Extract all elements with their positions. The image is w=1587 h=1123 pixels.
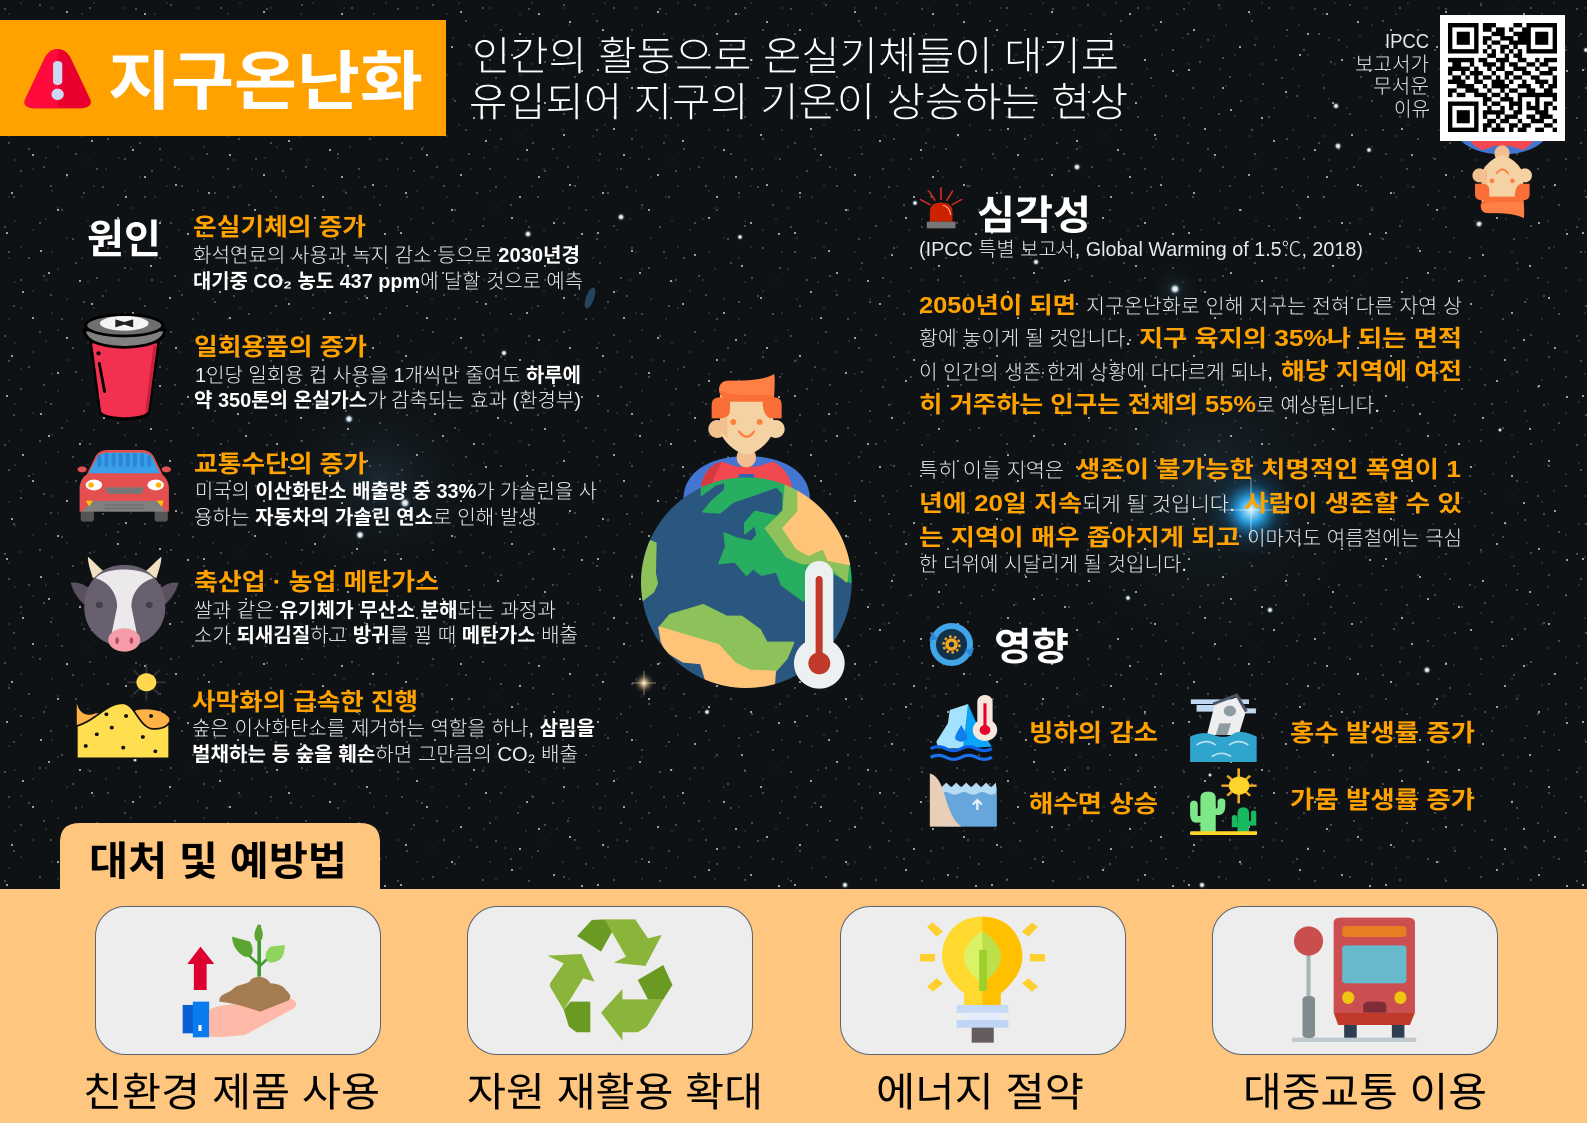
cause 1: greenhouse gases: [193, 214, 583, 293]
subtitle definition: 인간의 활동으로 온실기체들이 대기로: [472, 35, 1119, 79]
icon: disposable cup: [84, 315, 165, 421]
label: drought frequency: 가뭄 발생률 증가: [1290, 787, 1475, 814]
icon: desert: [77, 664, 169, 758]
paragraph 2: 는 지역이 매우 좁아지게 되고: [919, 524, 1240, 550]
cause 3: transport: 교통수단의 증가: [194, 451, 367, 478]
paragraph 1: 지구 육지의 35%나 되는 면적: [1139, 325, 1462, 351]
card: recycling: [468, 906, 752, 1054]
cause 4: livestock and agriculture: [194, 569, 578, 647]
card: energy saving: [840, 906, 1126, 1054]
QR caption: 보고서가: [1355, 53, 1429, 76]
label: sea level rise: 해수면 상승: [1029, 791, 1158, 818]
icon: melting iceberg: [931, 695, 997, 759]
icon: upside-down person under QR: [1453, 120, 1552, 218]
icon: drought: [1190, 768, 1257, 835]
illustration: person on earth with thermometer: [633, 374, 853, 693]
tab heading: [60, 823, 380, 889]
cause 5: desertification: 벌채하는 등 숲을 훼손하면 그만큼의 CO₂ 배출: [192, 743, 578, 766]
thermometer: [794, 561, 845, 689]
heading: causes: 원인: [87, 218, 161, 262]
paragraph 1: 해당 지역에 여전: [1281, 358, 1462, 384]
label: flood frequency: 홍수 발생률 증가: [1290, 720, 1475, 747]
paragraph 1: 이 인간의 생존 한계 상황에 다다르게 되나,: [919, 361, 1273, 384]
paragraph 1: 황에 놓이게 될 것입니다.: [919, 327, 1131, 350]
cause 5: desertification: 숲은 이산화탄소를 제거하는 역할을 하나, 삼림을: [192, 717, 595, 740]
icon: impact cycle: [929, 626, 974, 663]
icon: bus and stop: [1292, 918, 1416, 1042]
QR caption: [1355, 31, 1429, 121]
paragraph 1: 2050년이 되면: [919, 292, 1076, 318]
paragraph 2: 이마저도 여름철에는 극심: [1247, 527, 1462, 550]
label: recycling: 자원 재활용 확대: [467, 1071, 763, 1115]
cause 3: transport: 용하는 자동차의 가솔린 연소로 인해 발생: [194, 506, 537, 529]
paragraph 2: 되게 될 것입니다.: [1082, 493, 1235, 516]
banner title text: 지구온난화: [108, 46, 423, 118]
icon: hand with plant: [183, 924, 296, 1037]
paragraph 2: 특히 이들 지역은: [919, 459, 1064, 482]
cause 2: disposable products: 1인당 일회용 컵 사용을 1개씩만 줄여도 하루에: [195, 364, 581, 387]
subtitle definition: 유입되어 지구의 기온이 상승하는 현상: [469, 81, 1128, 125]
icon: recycle: [547, 919, 672, 1041]
label: public transport: 대중교통 이용: [1243, 1071, 1487, 1115]
panel: response and prevention: [0, 823, 1587, 1123]
paragraph 2: 생존이 불가능한 치명적인 폭염이 1: [1076, 456, 1461, 482]
icon: warning triangle: [24, 49, 91, 108]
paragraph 2: 한 더위에 시달리게 될 것입니다.: [919, 553, 1187, 576]
paragraph 2: [919, 456, 1462, 576]
cause 2: disposable products: 약 350톤의 온실가스가 감축되는 효과 (환경부): [194, 389, 581, 412]
person: [683, 374, 810, 500]
QR caption: 무서운: [1373, 75, 1429, 98]
QR code: [1440, 15, 1565, 141]
label: glacier loss: 빙하의 감소: [1029, 720, 1158, 747]
icon: siren: [920, 187, 962, 228]
icon: light bulb: [920, 917, 1045, 1043]
cause 1: greenhouse gases: 대기중 CO₂ 농도 437 ppm에 달할 것으로 예측: [193, 270, 583, 293]
paragraph 1: 지구온난화로 인해 지구는 전혀 다른 자연 상: [1086, 295, 1462, 318]
cause 4: livestock and agriculture: 소가 되새김질하고 방귀를 뀔 때 메탄가스 배출: [194, 624, 578, 647]
cause 4: livestock and agriculture: 축산업 · 농업 메탄가스: [194, 569, 439, 596]
cause 3: transport: 미국의 이산화탄소 배출량 중 33%가 가솔린을 사: [195, 480, 597, 503]
cause 1: greenhouse gases: 온실기체의 증가: [193, 214, 366, 241]
label: energy saving: 에너지 절약: [876, 1071, 1084, 1115]
globe: [633, 473, 853, 693]
paragraph 2: 사람이 생존할 수 있: [1244, 490, 1462, 516]
QR caption: 이유: [1394, 98, 1429, 121]
paragraph 1: 로 예상됩니다.: [1256, 394, 1380, 417]
cause 4: livestock and agriculture: 쌀과 같은 유기체가 무산소 분해되는 과정과: [194, 599, 556, 622]
label: eco-friendly products: 친환경 제품 사용: [83, 1071, 380, 1115]
icon: cow: [71, 557, 179, 652]
paragraph 2: 년에 20일 지속: [919, 490, 1082, 516]
cause 5: desertification: 사막화의 급속한 진행: [192, 689, 418, 716]
source citation: (IPCC 특별 보고서, Global Warming of 1.5℃, 2018): [919, 238, 1363, 261]
subtitle definition: [469, 35, 1128, 125]
QR caption: IPCC: [1385, 31, 1429, 53]
title banner: [0, 20, 446, 136]
icon: flooded house: [1190, 695, 1257, 762]
card: eco-friendly products: [96, 906, 380, 1054]
heading: severity: 심각성: [977, 194, 1091, 238]
paragraph 1: 히 거주하는 인구는 전체의 55%: [919, 391, 1256, 417]
tab heading: 대처 및 예방법: [89, 840, 347, 884]
card: public transport: [1212, 906, 1498, 1054]
icon: car: [77, 450, 171, 522]
cause 1: greenhouse gases: 화석연료의 사용과 녹지 감소 등으로 2030년경: [193, 244, 580, 267]
cause 5: desertification: [192, 689, 595, 766]
heading: impact: 영향: [994, 627, 1069, 669]
cause 2: disposable products: 일회용품의 증가: [194, 334, 367, 361]
cause 3: transport: [194, 451, 597, 529]
cause 2: disposable products: [194, 334, 581, 412]
icon: sea level rise: [930, 773, 997, 827]
paragraph 1: [919, 292, 1462, 417]
